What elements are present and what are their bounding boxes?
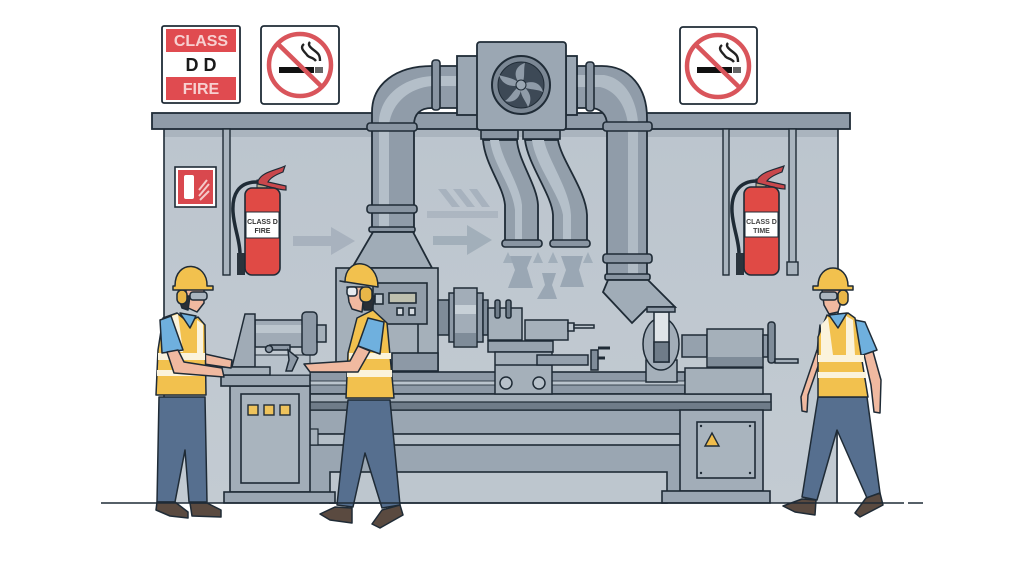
- vest left worker: [156, 313, 206, 395]
- vest middle worker: [346, 310, 394, 398]
- sleeves right worker: [817, 320, 877, 356]
- worker left: [156, 266, 232, 518]
- trousers middle worker: [337, 400, 400, 508]
- extinguisher left: CLASS D: [247, 219, 278, 226]
- drop ducts: [481, 130, 590, 247]
- far arm left worker: [204, 354, 232, 368]
- reflective stripes right worker: [818, 316, 866, 378]
- arm left worker: [167, 350, 224, 377]
- sign: extinguisher location: [175, 167, 216, 207]
- trousers left worker: [157, 397, 207, 502]
- helmet middle worker: [340, 264, 378, 287]
- sign: no smoking right: [680, 27, 757, 104]
- left exhaust duct: [352, 60, 460, 268]
- back wall: [164, 129, 838, 503]
- ear muff middle worker: [360, 287, 372, 302]
- ear muff left worker: [177, 290, 187, 304]
- vest right worker: [818, 313, 868, 397]
- airflow below nozzles: [503, 252, 593, 299]
- extinguisher right: TIME: [753, 228, 770, 235]
- sign: class D fire: [162, 26, 240, 103]
- sign: class D fire: D D: [186, 55, 216, 75]
- sleeve middle worker: [358, 318, 384, 354]
- collar right worker: [829, 313, 847, 328]
- head right worker: [822, 290, 840, 314]
- goggles right worker: [820, 292, 837, 300]
- extinguisher right: [732, 166, 785, 275]
- helmet right worker: [813, 268, 853, 290]
- shirt and sleeve left worker: [160, 313, 196, 353]
- boots left worker: [156, 502, 221, 518]
- shelf: [152, 113, 850, 129]
- ear muff right worker: [838, 290, 848, 305]
- sign: no smoking left: [261, 26, 339, 104]
- arms right worker: [801, 348, 881, 413]
- hair middle worker: [362, 296, 375, 310]
- extinguisher left: FIRE: [255, 228, 271, 235]
- sign: class D fire: FIRE: [183, 81, 220, 98]
- trousers right worker: [802, 397, 880, 500]
- boots right worker: [783, 493, 883, 517]
- goggles left worker: [190, 292, 207, 300]
- worker right: [783, 268, 883, 517]
- wall conduits: [223, 129, 798, 275]
- head middle worker: [347, 287, 363, 312]
- fan unit: [457, 42, 577, 130]
- reflective stripes middle worker: [347, 353, 392, 377]
- extinguisher right: CLASS D: [746, 219, 777, 226]
- chuck assembly: [220, 312, 326, 375]
- hair left worker: [178, 296, 190, 310]
- right exhaust duct: [577, 62, 675, 323]
- lathe bed: [310, 372, 771, 503]
- airflow arrows: [293, 189, 498, 255]
- reflective stripes left worker: [157, 314, 206, 376]
- helmet left worker: [173, 266, 213, 290]
- ground line: [101, 502, 923, 504]
- grinder and tailstock: [643, 307, 798, 394]
- boots middle worker: [320, 505, 403, 528]
- hood box and control panel: [336, 268, 438, 371]
- worker middle: [304, 264, 403, 528]
- right pedestal: [662, 410, 770, 503]
- sign: class D fire: CLASS: [174, 33, 228, 50]
- left cabinet: [221, 375, 335, 503]
- arm middle worker: [304, 346, 370, 372]
- goggles middle worker: [347, 287, 357, 296]
- head left worker: [186, 288, 204, 312]
- spindle and carriage: [438, 288, 610, 394]
- extinguisher left: [233, 166, 286, 275]
